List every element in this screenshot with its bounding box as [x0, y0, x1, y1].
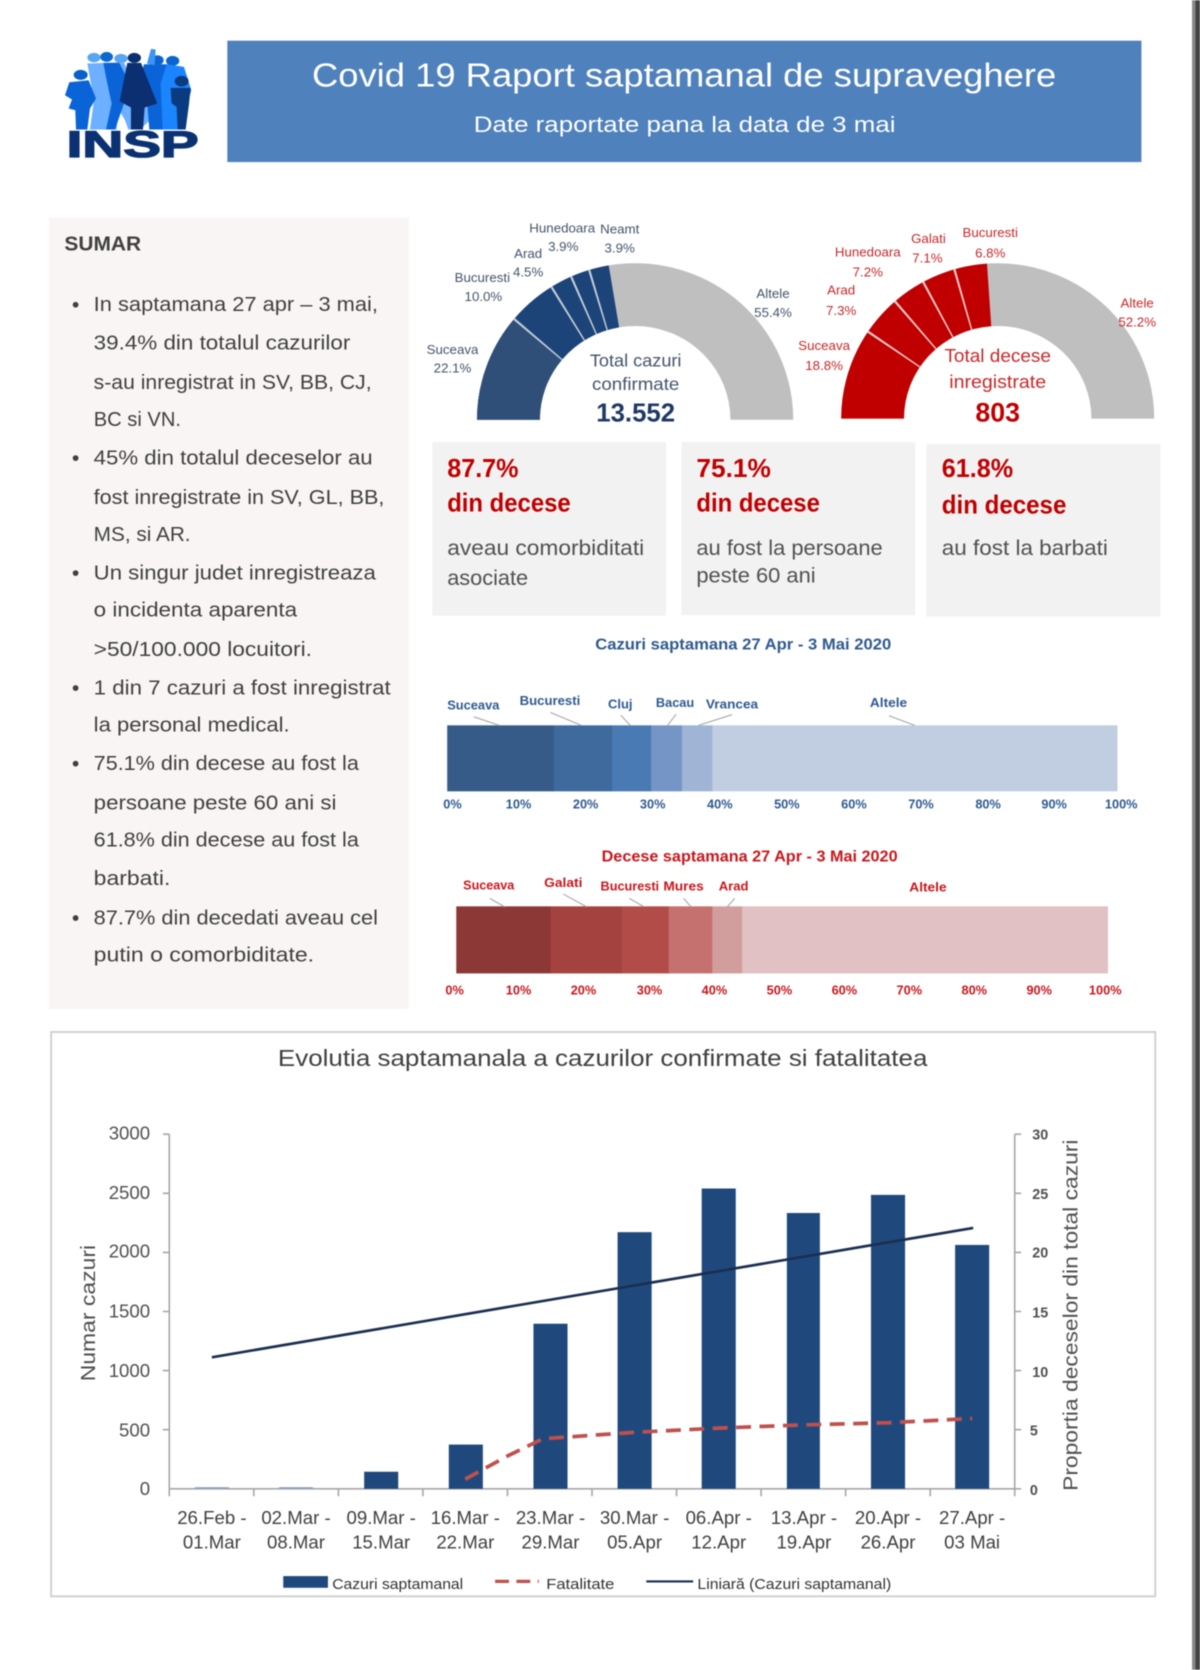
- bar axis: 100%: [1105, 796, 1138, 811]
- card description: au fost la barbati: [942, 536, 1108, 560]
- summary bullet 1: s-au inregistrat in SV, BB, CJ,: [94, 371, 372, 394]
- gauge labels: cases: Bucuresti: [455, 270, 510, 285]
- summary bullet 1: In saptamana 27 apr – 3 mai,: [94, 293, 378, 316]
- card description: au fost la persoane: [696, 536, 883, 560]
- bar axis: 10%: [506, 796, 532, 811]
- card percent: 87.7%: [447, 455, 519, 483]
- right axis labels: 10: [1032, 1365, 1048, 1381]
- right axis labels: 20: [1032, 1246, 1048, 1262]
- x axis labels: 09.Mar -: [347, 1507, 416, 1528]
- chart: weekly cases stacked bar: [443, 637, 1138, 811]
- bar labels: [463, 875, 947, 894]
- bar labels: Cluj: [608, 696, 632, 711]
- gauge labels: deaths: Altele: [1121, 295, 1154, 310]
- card percent: 61.8%: [942, 455, 1013, 483]
- gauge labels: deaths: Hunedoara: [835, 244, 901, 259]
- gauge center text: cases: Total cazuri: [590, 350, 681, 370]
- chart legend: [283, 1576, 891, 1593]
- chart legend: Cazuri saptamanal: [332, 1577, 463, 1593]
- card heading: din decese: [942, 491, 1066, 519]
- card background: [926, 444, 1161, 617]
- summary background: [49, 217, 409, 1009]
- x axis labels: 08.Mar: [267, 1531, 325, 1552]
- gauge labels: cases: 22.1%: [434, 360, 472, 375]
- x axis labels: [177, 1507, 1005, 1552]
- bar axis: 80%: [961, 983, 988, 998]
- bar labels: Altele: [870, 695, 907, 710]
- gauge labels: deaths: 6.8%: [975, 245, 1006, 260]
- card heading: din decese: [696, 489, 820, 517]
- gauge labels: cases: 4.5%: [513, 265, 543, 280]
- bar axis: 30%: [640, 796, 666, 811]
- bar axis: 0%: [445, 983, 465, 998]
- chart axes: [163, 1134, 1021, 1496]
- gauge labels: cases: 55.4%: [754, 305, 792, 320]
- gauge labels: cases: Neamt: [600, 221, 640, 236]
- right axis labels: 30: [1032, 1128, 1048, 1144]
- x axis labels: 29.Mar: [522, 1531, 579, 1552]
- summary bullet 2: 45% din totalul deceselor au: [94, 446, 373, 469]
- x axis labels: 30.Mar -: [600, 1507, 669, 1528]
- chart legend: Liniară (Cazuri saptamanal): [697, 1577, 891, 1593]
- summary bullet 2: [73, 446, 384, 546]
- chart: weekly deaths stacked bar: [445, 849, 1122, 998]
- left axis labels: 2500: [109, 1182, 150, 1203]
- summary bullet 6: putin o comorbiditate.: [94, 944, 314, 967]
- bar title: Decese saptamana 27 Apr - 3 Mai 2020: [602, 849, 898, 866]
- gauge center text: cases: confirmate: [592, 374, 679, 394]
- bar segments: [447, 725, 1117, 791]
- panel: summary: [49, 217, 409, 1009]
- right axis labels: 15: [1032, 1305, 1048, 1321]
- gauge labels: deaths: Bucuresti: [963, 225, 1018, 240]
- gauge labels: cases: [427, 220, 792, 375]
- bar axis: [445, 983, 1122, 998]
- gauge center text: deaths: Total decese: [944, 346, 1051, 366]
- x axis labels: 15.Mar: [352, 1531, 410, 1552]
- gauge labels: deaths: Galati: [911, 231, 946, 246]
- x axis labels: 19.Apr: [776, 1531, 831, 1552]
- title: Covid 19 Raport saptamanal de supraveghere: [312, 56, 1056, 93]
- bar axis: 20%: [573, 796, 599, 811]
- x axis labels: 26.Apr: [861, 1531, 915, 1552]
- right axis labels: 0: [1030, 1483, 1038, 1499]
- summary bullet 3: Un singur judet inregistreaza: [94, 561, 376, 584]
- summary heading: SUMAR: [64, 233, 141, 255]
- bar labels: Altele: [909, 879, 947, 894]
- summary bullet 2: MS, si AR.: [94, 523, 191, 546]
- gauge center text: cases: 13.552: [596, 399, 675, 427]
- gauge labels: cases: Suceava: [427, 342, 479, 357]
- gauge labels: deaths: [798, 225, 1156, 373]
- bar axis: 0%: [443, 796, 462, 811]
- subtitle: Date raportate pana la data de 3 mai: [474, 112, 895, 137]
- left axis title: Numar cazuri: [78, 1245, 100, 1381]
- gauge center text: deaths: inregistrate: [949, 372, 1046, 392]
- gauge labels: deaths: Suceava: [798, 338, 851, 353]
- x axis labels: 06.Apr -: [686, 1507, 752, 1528]
- gauge labels: deaths: 52.2%: [1118, 315, 1156, 330]
- gauge labels: cases: Hunedoara: [529, 220, 596, 235]
- gauge center text: deaths: 803: [975, 397, 1020, 427]
- chart legend: Fatalitate: [546, 1577, 614, 1593]
- summary bullet 5: [73, 752, 359, 890]
- bar leader lines: [474, 713, 915, 725]
- summary bullet 5: 61.8% din decese au fost la: [94, 829, 359, 852]
- chart title: Evolutia saptamanala a cazurilor confirmate si fatalitatea: [278, 1045, 928, 1071]
- summary bullet 4: 1 din 7 cazuri a fost inregistrat: [94, 676, 391, 699]
- x axis labels: 12.Apr: [691, 1531, 746, 1552]
- gauge labels: cases: Altele: [756, 286, 790, 301]
- right axis labels: 5: [1030, 1424, 1038, 1440]
- right axis title: Proportia deceselor din total cazuri: [1061, 1140, 1083, 1491]
- summary bullet 5: persoane peste 60 ani si: [94, 791, 336, 814]
- summary bullet 3: >50/100.000 locuitori.: [94, 638, 312, 661]
- chart: deaths gauge: [798, 225, 1156, 427]
- left axis labels: 2000: [109, 1241, 150, 1262]
- title banner: [227, 41, 1141, 162]
- summary bullet 5: 75.1% din decese au fost la: [94, 752, 359, 775]
- left axis labels: 0: [140, 1478, 150, 1499]
- bar segments: [456, 906, 1108, 973]
- bar axis: 90%: [1041, 796, 1068, 811]
- bar labels: Bucuresti: [520, 693, 580, 708]
- bar labels: Bucuresti: [601, 878, 659, 893]
- gauge labels: deaths: Arad: [827, 283, 855, 298]
- bar axis: 20%: [571, 983, 597, 998]
- gauge labels: deaths: 7.2%: [853, 265, 883, 280]
- gauge labels: deaths: 18.8%: [805, 358, 843, 373]
- gauge arcs: deaths: [873, 295, 1123, 419]
- summary bullet 5: barbati.: [94, 867, 170, 890]
- summary bullet 1: [73, 293, 378, 431]
- bar labels: Mures: [663, 878, 704, 893]
- chart: confirmed cases gauge: [427, 220, 792, 427]
- bar labels: Suceava: [447, 697, 500, 712]
- gauge labels: deaths: 7.1%: [912, 251, 943, 266]
- summary bullet 1: 39.4% din totalul cazurilor: [94, 331, 350, 354]
- bar axis: 100%: [1089, 983, 1122, 998]
- bar axis: 90%: [1026, 983, 1053, 998]
- stat card: over 60: peste 60 ani: [696, 564, 816, 588]
- x axis labels: 03 Mai: [944, 1531, 1000, 1552]
- bar axis: 30%: [637, 983, 663, 998]
- logo wordmark: INSP: [67, 123, 199, 165]
- weekly case bars: [195, 1189, 989, 1489]
- x axis labels: 23.Mar -: [516, 1507, 585, 1528]
- x axis labels: 20.Apr -: [855, 1507, 921, 1528]
- stat card: comorbidities: asociate: [447, 566, 528, 590]
- bar axis: 10%: [506, 983, 532, 998]
- summary bullet 6: [73, 906, 378, 967]
- card background: [681, 442, 915, 615]
- gauge labels: cases: Arad: [514, 246, 542, 261]
- logo silhouettes: [65, 49, 191, 130]
- bar axis: 40%: [707, 796, 733, 811]
- gauge labels: cases: 3.9%: [548, 239, 579, 254]
- gauge labels: deaths: 7.3%: [826, 303, 856, 318]
- trend line: [212, 1228, 973, 1357]
- chart frame: [51, 1032, 1155, 1596]
- bar axis: 50%: [774, 796, 800, 811]
- fatality line: [465, 1418, 972, 1479]
- left axis labels: 1000: [109, 1360, 150, 1381]
- card description: aveau comorbiditati: [447, 536, 644, 560]
- x axis labels: 16.Mar -: [431, 1507, 500, 1528]
- stat card: comorbidities: [432, 442, 666, 616]
- x axis labels: 13.Apr -: [771, 1507, 837, 1528]
- summary bullet 3: [73, 561, 376, 661]
- gauge arcs: cases: [508, 295, 762, 420]
- gauge labels: cases: 3.9%: [605, 241, 635, 256]
- summary bullet 4: [73, 676, 391, 737]
- summary bullet 3: o incidenta aparenta: [94, 599, 298, 622]
- bar axis: 50%: [767, 983, 793, 998]
- bar labels: Vrancea: [706, 696, 759, 711]
- x axis labels: 27.Apr -: [939, 1507, 1005, 1528]
- logo: INSP: [65, 49, 199, 165]
- left axis labels: [109, 1123, 150, 1499]
- bar labels: Galati: [544, 875, 582, 890]
- bar labels: Suceava: [463, 877, 515, 892]
- bar leader lines: [490, 894, 735, 907]
- bar labels: [447, 693, 907, 712]
- x axis labels: 02.Mar -: [261, 1507, 331, 1528]
- x axis labels: 01.Mar: [183, 1531, 241, 1552]
- gauge labels: cases: 10.0%: [465, 289, 502, 304]
- panel: weekly evolution chart: [51, 1032, 1155, 1596]
- card background: [432, 442, 666, 616]
- bar axis: 80%: [975, 796, 1002, 811]
- left axis labels: 1500: [109, 1300, 150, 1321]
- card percent: 75.1%: [696, 455, 771, 483]
- bar axis: [443, 796, 1138, 811]
- summary bullet 6: 87.7% din decedati aveau cel: [94, 906, 378, 929]
- right axis labels: [1030, 1128, 1048, 1499]
- gauge center text: cases: [590, 350, 681, 427]
- bar labels: Arad: [719, 878, 749, 893]
- bar labels: Bacau: [656, 695, 694, 710]
- stat card: men: [926, 444, 1161, 617]
- banner background: [227, 41, 1141, 162]
- x axis labels: 22.Mar: [436, 1531, 494, 1552]
- bar axis: 40%: [702, 983, 728, 998]
- gauge center text: deaths: [944, 346, 1051, 427]
- card heading: din decese: [447, 489, 571, 517]
- summary bullet 2: fost inregistrate in SV, GL, BB,: [94, 486, 384, 509]
- x axis labels: 05.Apr: [607, 1531, 662, 1552]
- bar axis: 70%: [897, 983, 923, 998]
- x axis labels: 26.Feb -: [177, 1507, 247, 1528]
- bar axis: 60%: [832, 983, 858, 998]
- bar axis: 60%: [841, 796, 867, 811]
- bar axis: 70%: [908, 796, 934, 811]
- left axis labels: 3000: [109, 1123, 150, 1144]
- right axis labels: 25: [1032, 1187, 1048, 1203]
- bar title: Cazuri saptamana 27 Apr - 3 Mai 2020: [595, 637, 891, 654]
- summary bullet 4: la personal medical.: [94, 714, 290, 737]
- left axis labels: 500: [119, 1420, 150, 1441]
- stat card: over 60: [681, 442, 915, 615]
- summary bullet 1: BC si VN.: [94, 408, 181, 431]
